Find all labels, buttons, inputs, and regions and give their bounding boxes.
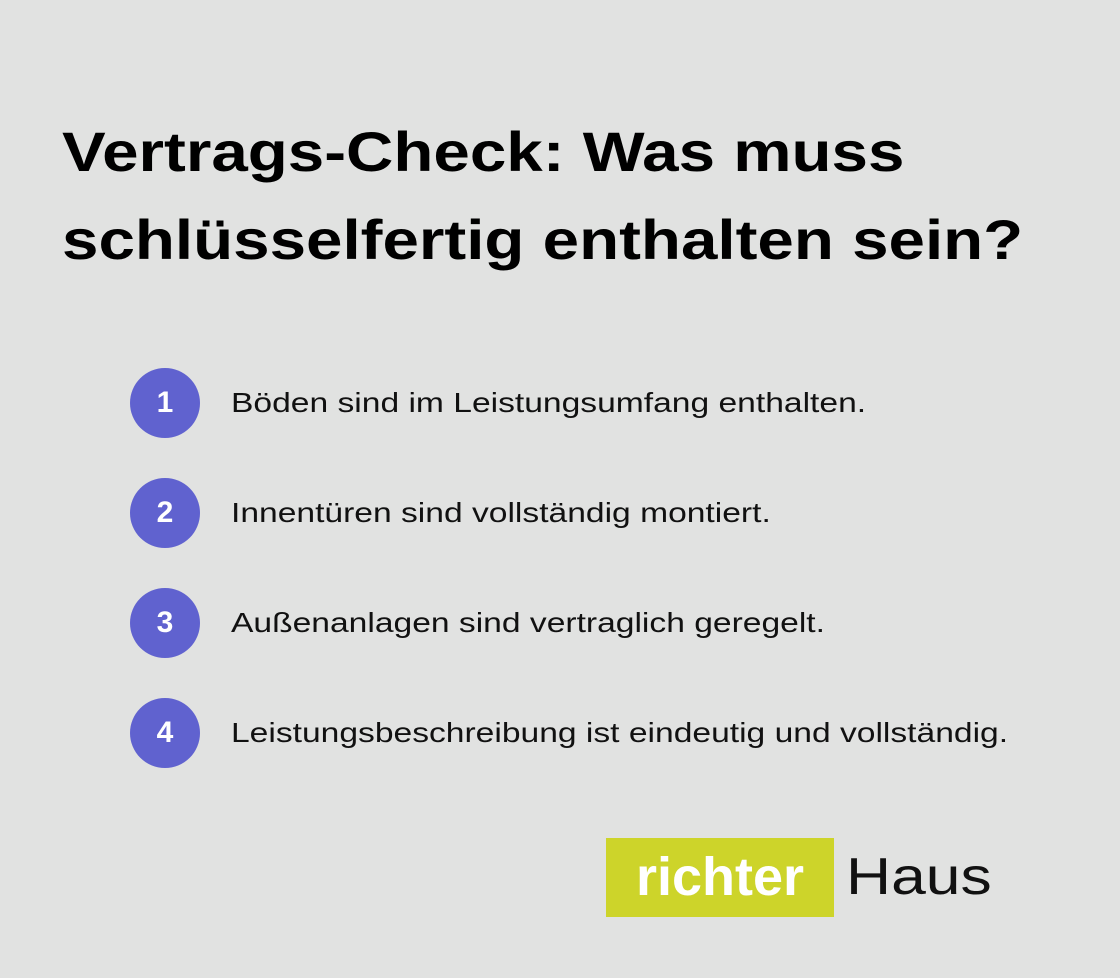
item 1 xyxy=(130,368,866,438)
item 2: 2 xyxy=(157,496,173,529)
item 3 xyxy=(130,588,825,658)
item 1: Böden sind im Leistungsumfang enthalten. xyxy=(231,387,866,418)
item 4: Leistungsbeschreibung ist eindeutig und vollständig. xyxy=(231,717,1008,748)
item 4 xyxy=(130,698,1008,768)
item 1: 1 xyxy=(157,386,173,419)
logo: richter xyxy=(636,847,804,907)
item 2 xyxy=(130,478,771,548)
item 4: 4 xyxy=(157,716,173,749)
title: Vertrags-Check: Was muss xyxy=(62,120,904,183)
title xyxy=(62,120,1023,271)
title: schlüsselfertig enthalten sein? xyxy=(62,208,1023,271)
logo xyxy=(606,838,992,917)
item 3: 3 xyxy=(157,606,173,639)
item 2: Innentüren sind vollständig montiert. xyxy=(231,497,771,528)
item 3: Außenanlagen sind vertraglich geregelt. xyxy=(231,607,825,638)
logo: Haus xyxy=(846,848,992,906)
